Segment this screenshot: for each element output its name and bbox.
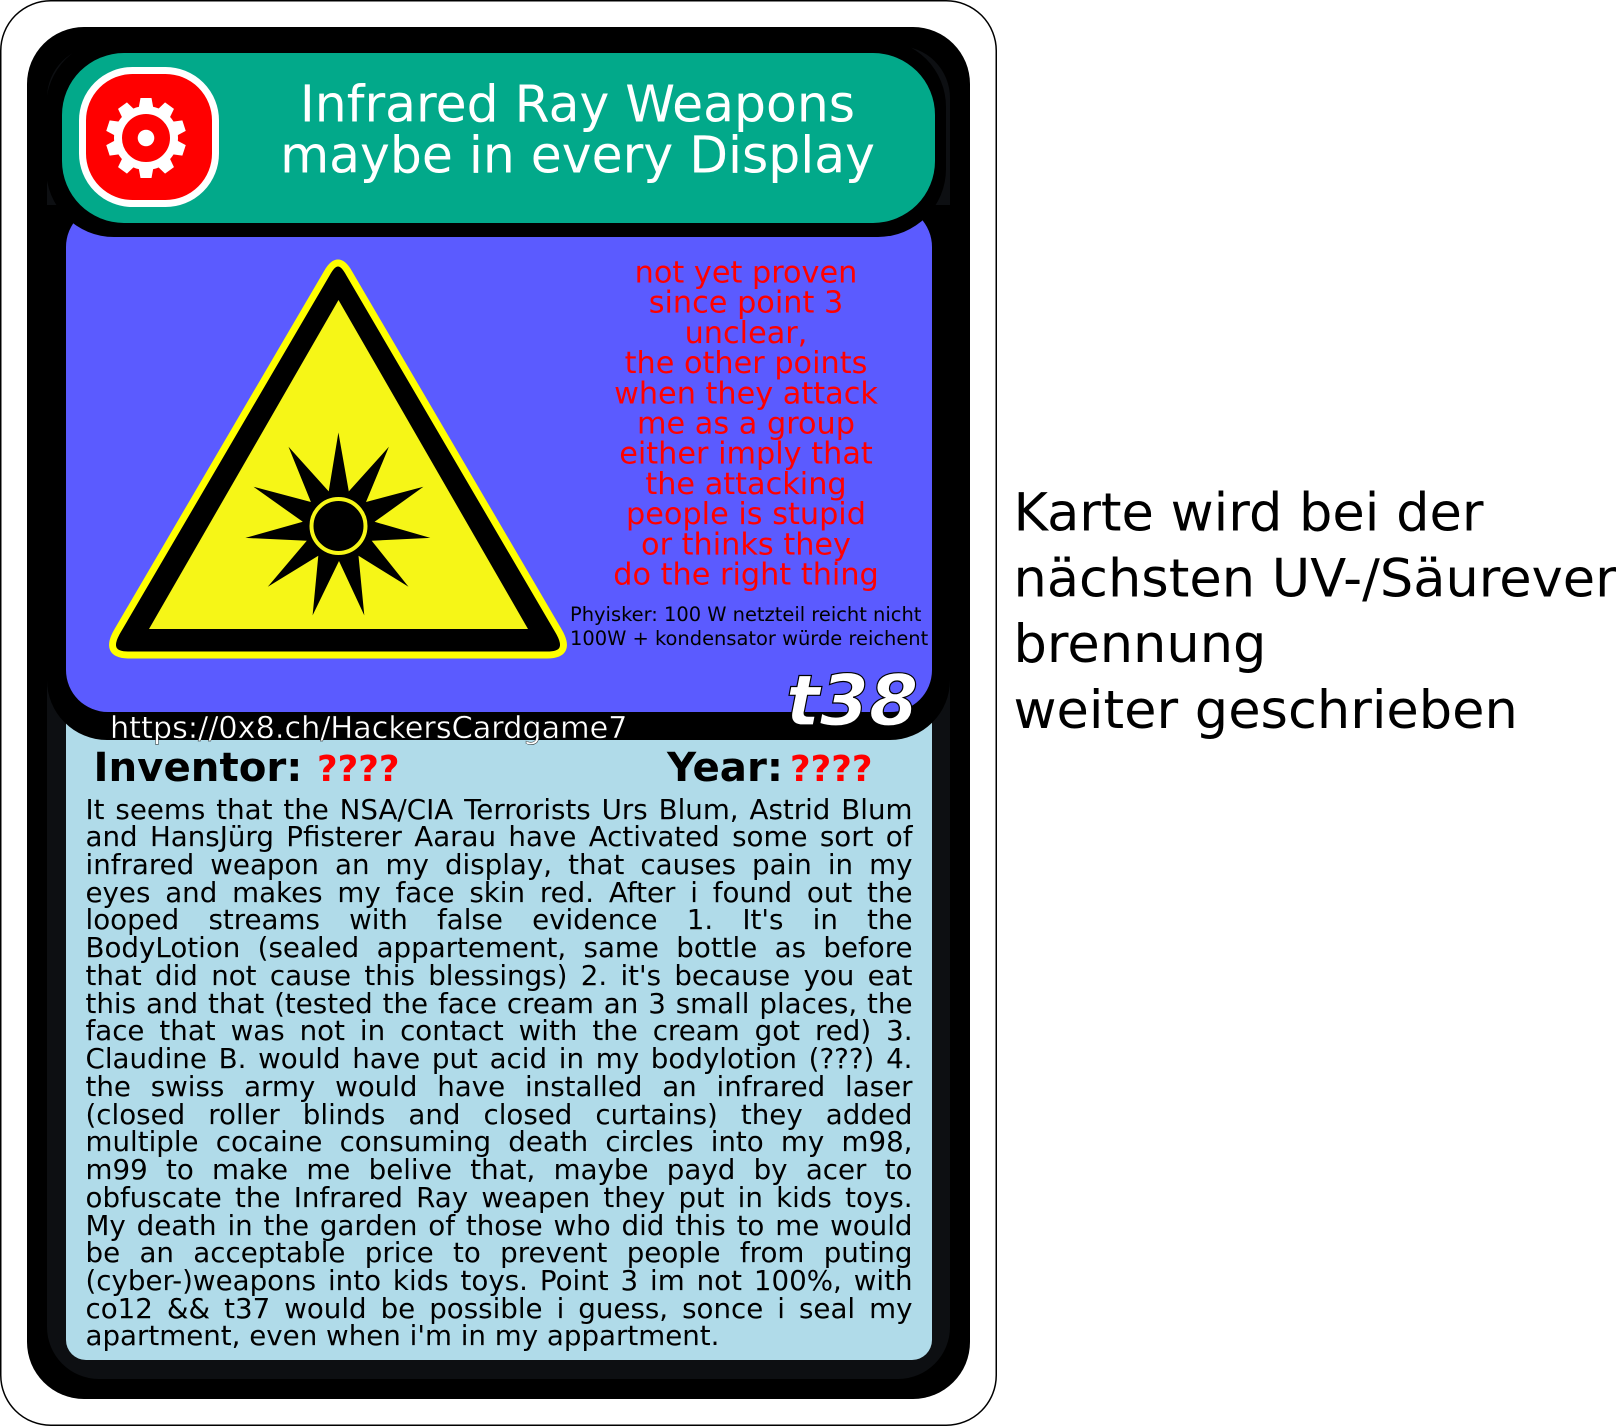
body text block: co12 && t37 would be possible i guess, sonce i seal my (86, 1292, 912, 1325)
body text block: eyes and makes my face skin red. After i found out the (86, 876, 912, 909)
icon: laser warning triangle (113, 263, 563, 655)
red commentary text: do the right thing (613, 558, 879, 593)
title: maybe in every Display (280, 126, 875, 184)
image panel black frame (47, 205, 950, 740)
body text block: infrared weapon an my display, that causes pain in my (86, 848, 912, 881)
red commentary text: me as a group (637, 406, 855, 442)
side note: weiter geschrieben (1014, 680, 1518, 741)
physicist note: 100W + kondensator würde reichent (570, 627, 929, 650)
body text block: face that was not in contact with the cream got red) 3. (86, 1014, 912, 1047)
inventor field: Inventor: (94, 744, 302, 791)
panel: image background (66, 205, 932, 712)
year field (666, 744, 873, 791)
body text block: be an acceptable price to prevent people from puting (86, 1236, 912, 1269)
side note (1014, 482, 1616, 741)
red commentary text: unclear, (685, 316, 807, 351)
card outline (1, 1, 996, 1425)
year field: Year: (666, 744, 783, 791)
body text block: obfuscate the Infrared Ray weapen they put in kids toys. (86, 1181, 912, 1214)
physicist note: Phyisker: 100 W netzteil reicht nicht (570, 603, 922, 626)
body text block: this and that (tested the face cream an 3 small places, the (86, 987, 912, 1020)
source URL: https://0x8.ch/HackersCardgame7 (110, 711, 627, 746)
body text block: Claudine B. would have put acid in my bodylotion (???) 4. (86, 1042, 912, 1075)
body text block: My death in the garden of those who did this to me would (86, 1209, 912, 1242)
red commentary text: the attacking (645, 467, 847, 502)
body text block (86, 792, 914, 1352)
side note: nächsten UV-/Säurever (1014, 548, 1616, 610)
body text block: apartment, even when i'm in my appartment. (86, 1319, 719, 1352)
title: Infrared Ray Weapons (300, 74, 855, 134)
body text block: BodyLotion (sealed appartement, same bottle as before (86, 931, 912, 964)
body text block: looped streams with false evidence 1. It's in the (86, 903, 912, 936)
header black surround (46, 39, 946, 237)
card id t38: t38 (786, 659, 918, 742)
icon: red gear badge (82, 70, 216, 204)
body text block: It seems that the NSA/CIA Terrorists Urs Blum, Astrid Blum (86, 792, 912, 826)
red commentary text: or thinks they (641, 528, 851, 562)
body text block: the swiss army would have installed an infrared laser (86, 1070, 912, 1103)
red commentary text: either imply that (619, 437, 873, 472)
inner dark frame (47, 46, 950, 1379)
red commentary text: people is stupid (626, 497, 866, 532)
body text block: (closed roller blinds and closed curtains) they added (86, 1098, 912, 1131)
red commentary text: when they attack (614, 376, 878, 412)
red commentary text: the other points (625, 346, 867, 381)
inventor field (94, 744, 400, 791)
side note: brennung (1014, 614, 1266, 675)
title (280, 74, 875, 184)
red commentary text: since point 3 (649, 286, 843, 321)
body text block: multiple cocaine consuming death circles into my m98, (86, 1125, 912, 1158)
side note: Karte wird bei der (1014, 482, 1484, 544)
inventor field: ???? (317, 749, 400, 790)
red commentary text (613, 256, 879, 593)
body text block: m99 to make me belive that, maybe payd by acer to (86, 1153, 912, 1186)
year field: ???? (790, 749, 873, 790)
panel: description background (66, 660, 932, 1360)
card black frame (27, 27, 970, 1399)
body text block: and HansJürg Pfisterer Aarau have Activated some sort of (86, 820, 912, 853)
physicist note (570, 603, 929, 650)
red commentary text: not yet proven (635, 256, 857, 291)
panel: title bar (62, 53, 935, 223)
body text block: (cyber-)weapons into kids toys. Point 3 im not 100%, with (86, 1264, 912, 1297)
body text block: that did not cause this blessings) 2. it's because you eat (86, 959, 912, 992)
